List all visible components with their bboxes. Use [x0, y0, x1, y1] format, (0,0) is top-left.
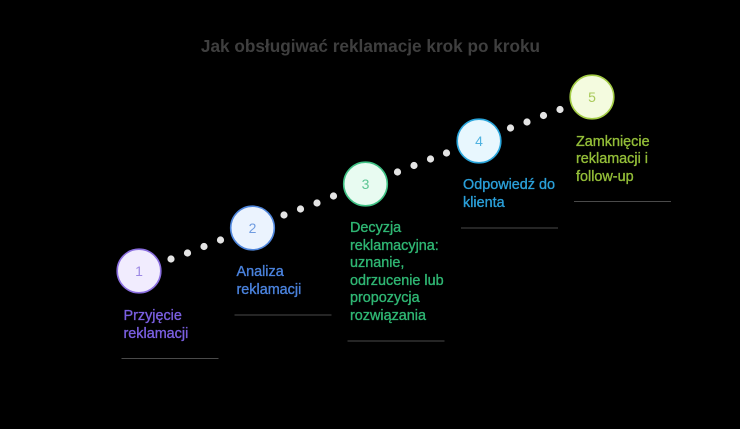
- step 2 circle: [231, 206, 274, 250]
- step 3 circle: [344, 162, 387, 206]
- step 1 circle: [117, 249, 161, 293]
- dotted connector: step 2 to 3: [280, 192, 337, 219]
- step 2 label: Analiza: [236, 264, 284, 280]
- step 4 number: 4: [475, 133, 483, 149]
- dotted connector: step 4 to 5: [507, 106, 564, 132]
- step 5 circle: [570, 75, 614, 119]
- step 2 label: reklamacji: [236, 282, 301, 298]
- step 3 label: reklamacyjna:: [350, 238, 439, 254]
- step 5 number: 5: [588, 89, 596, 105]
- dotted connector: step 3 to 4: [394, 149, 450, 176]
- dotted connector: step 1 to 2: [167, 236, 224, 263]
- step 5 label: Zamknięcie: [576, 134, 650, 150]
- step 3 divider: [348, 340, 444, 342]
- step 1: [117, 249, 218, 359]
- step 2 number: 2: [249, 220, 257, 236]
- step 4 circle: [457, 119, 501, 163]
- step 1 label: Przyjęcie: [124, 308, 182, 324]
- step 5: [570, 75, 671, 202]
- step 3 label: propozycja: [350, 290, 420, 306]
- step 5 label: follow-up: [576, 169, 634, 185]
- step 1 number: 1: [135, 263, 143, 279]
- step 5 label: reklamacji i: [576, 151, 648, 167]
- step 3 label: Decyzja: [350, 220, 401, 236]
- step 4 label: klienta: [463, 195, 505, 211]
- step 2 divider: [234, 314, 332, 316]
- step 3 label: rozwiązania: [350, 308, 426, 324]
- title: Jak obsługiwać reklamacje krok po kroku: [201, 36, 540, 56]
- step 1 divider: [122, 358, 218, 359]
- step 3 label: odrzucenie lub: [350, 273, 444, 289]
- step 3 label: uznanie,: [350, 255, 404, 271]
- step 3 number: 3: [362, 176, 370, 192]
- step 5 divider: [574, 201, 671, 202]
- step 4 divider: [461, 228, 558, 229]
- step 1 label: reklamacji: [124, 326, 188, 342]
- step 2: [231, 206, 332, 316]
- step 3: [344, 162, 444, 342]
- step 4 label: Odpowiedź do: [463, 177, 555, 193]
- step 4: [457, 119, 558, 228]
